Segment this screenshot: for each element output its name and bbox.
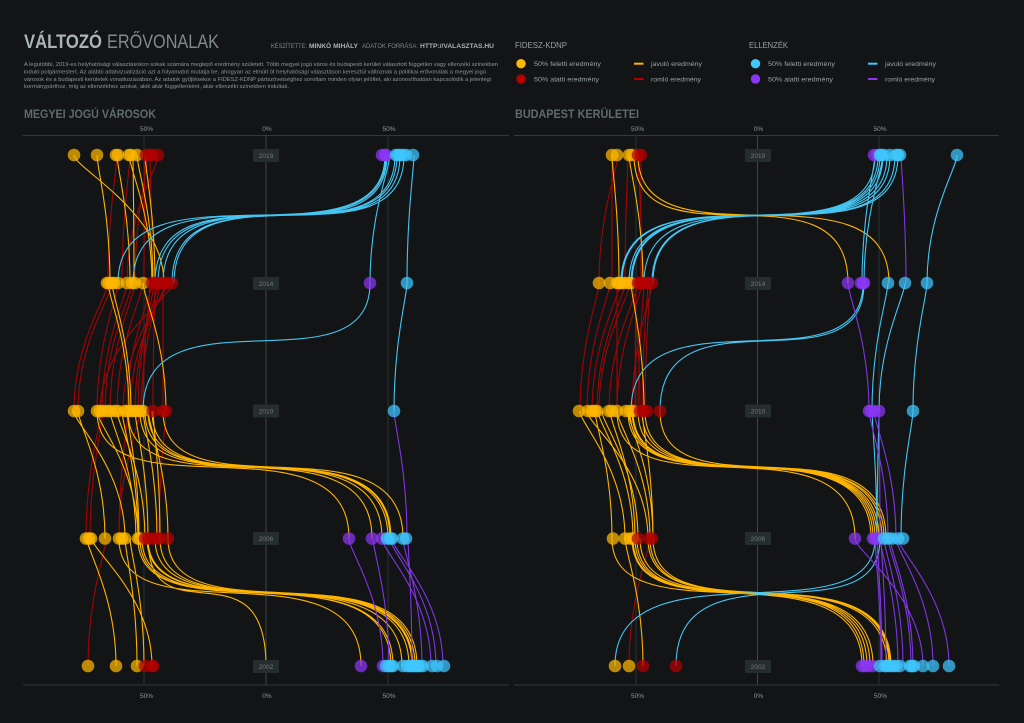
credits (271, 41, 494, 50)
intro text: A legutóbbi, 2019-es helyhatósági választásokon sokak számára meglepő eredmény született. Több megyei jogú város és budapesti kerület választott független vagy ellenzéki színekben (24, 62, 498, 68)
curves 2006-2002 right (612, 538, 949, 666)
credits: MINKÓ MIHÁLY (309, 41, 359, 50)
axes left: 50% (140, 126, 153, 133)
intro text: kormánypárthoz, míg az ellenzékhez azokat, akik akár függetlenként, akár ellenzéki színekben indultak. (24, 84, 289, 90)
axes right: 50% (631, 693, 644, 700)
year labels left: 2006 (259, 536, 274, 543)
axes right: 50% (873, 126, 887, 133)
title (24, 29, 219, 53)
axes left: 50% (140, 693, 153, 700)
heading: Budapest kerületei: BUDAPEST KERÜLETEI (515, 106, 639, 121)
year labels right: 2010 (751, 408, 766, 416)
credits: HTTP://VALASZTAS.HU (420, 43, 494, 50)
legend: Ellenzék: ELLENZÉK (749, 41, 789, 50)
year labels right: 2014 (751, 281, 766, 288)
curves 2019-2014 left (74, 155, 414, 283)
title: VÁLTOZÓ (24, 29, 102, 53)
axes right: 50% (874, 693, 887, 700)
year labels left: 2002 (259, 664, 274, 671)
panel: Megyei jogú városok (23, 126, 509, 700)
axes right: 0% (754, 126, 763, 133)
legend: Ellenzék: 50% alatti eredmény (768, 76, 834, 83)
legend: Fidesz-KDNP: romló eredmény (651, 76, 702, 83)
axes right (514, 126, 999, 700)
axes left: 50% (382, 693, 396, 700)
dots right (573, 149, 963, 672)
axes right: 50% (631, 126, 644, 133)
legend: Ellenzék: javuló eredmény (884, 61, 937, 68)
axes left: 50% (382, 126, 396, 133)
heading: Megyei jogú városok: MEGYEI JOGÚ VÁROSOK (24, 106, 156, 121)
intro text: induló polgármestert. Az alábbi adatvizualizáció azt a folyamatot mutatja be, ahogyan az elmúlt öt helyhatósági választáson keresztül változnak a politikai erővonalak a megyei jogú (24, 69, 486, 75)
legend: Fidesz-KDNP: javuló eredmény (650, 61, 703, 68)
curves 2014-2010 left (74, 283, 407, 411)
intro text (24, 62, 498, 90)
legend: Ellenzék: romló eredmény (885, 76, 936, 83)
year labels right: 2002 (751, 664, 766, 671)
legend: Fidesz-KDNP: 50% feletti eredmény (534, 61, 602, 68)
axes left (23, 126, 509, 700)
legend: Ellenzék (749, 41, 937, 84)
year labels right: 2006 (751, 536, 766, 543)
legend: Fidesz-KDNP: FIDESZ-KDNP (515, 41, 567, 50)
legend: Fidesz-KDNP: 50% alatti eredmény (534, 76, 600, 83)
curves 2006-2002 left (87, 538, 443, 666)
year labels right (745, 149, 771, 673)
legend: Fidesz-KDNP (515, 41, 703, 84)
intro text: városok és a budapesti kerületek vonatkozásában. Az adatok gyűjtésekor a FIDESZ-KDNP pártszövetséghez soroltam minden olyan jelöltet, aki azonosíthatóan kapcsolódik a jelenlegi (24, 77, 491, 83)
year labels left: 2010 (259, 408, 274, 416)
credits: ADATOK FORRÁSA: (362, 41, 418, 50)
axes left: 0% (262, 126, 272, 133)
dots left (68, 149, 450, 672)
axes right: 0% (754, 693, 763, 700)
credits: KÉSZÍTETTE: (271, 41, 307, 50)
title: ERŐVONALAK (107, 30, 219, 53)
curves 2010-2006 right (580, 411, 913, 538)
legend: Ellenzék: 50% feletti eredmény (768, 61, 836, 68)
curves 2010-2006 left (74, 411, 407, 538)
panel: Budapest kerületei (514, 126, 999, 700)
curves 2019-2014 right (599, 155, 957, 283)
axes left: 0% (262, 693, 272, 700)
curves 2014-2010 right (580, 283, 927, 411)
year labels left: 2014 (259, 281, 274, 288)
year labels right: 2019 (751, 153, 766, 160)
year labels left: 2019 (259, 153, 274, 160)
year labels left (253, 149, 279, 673)
